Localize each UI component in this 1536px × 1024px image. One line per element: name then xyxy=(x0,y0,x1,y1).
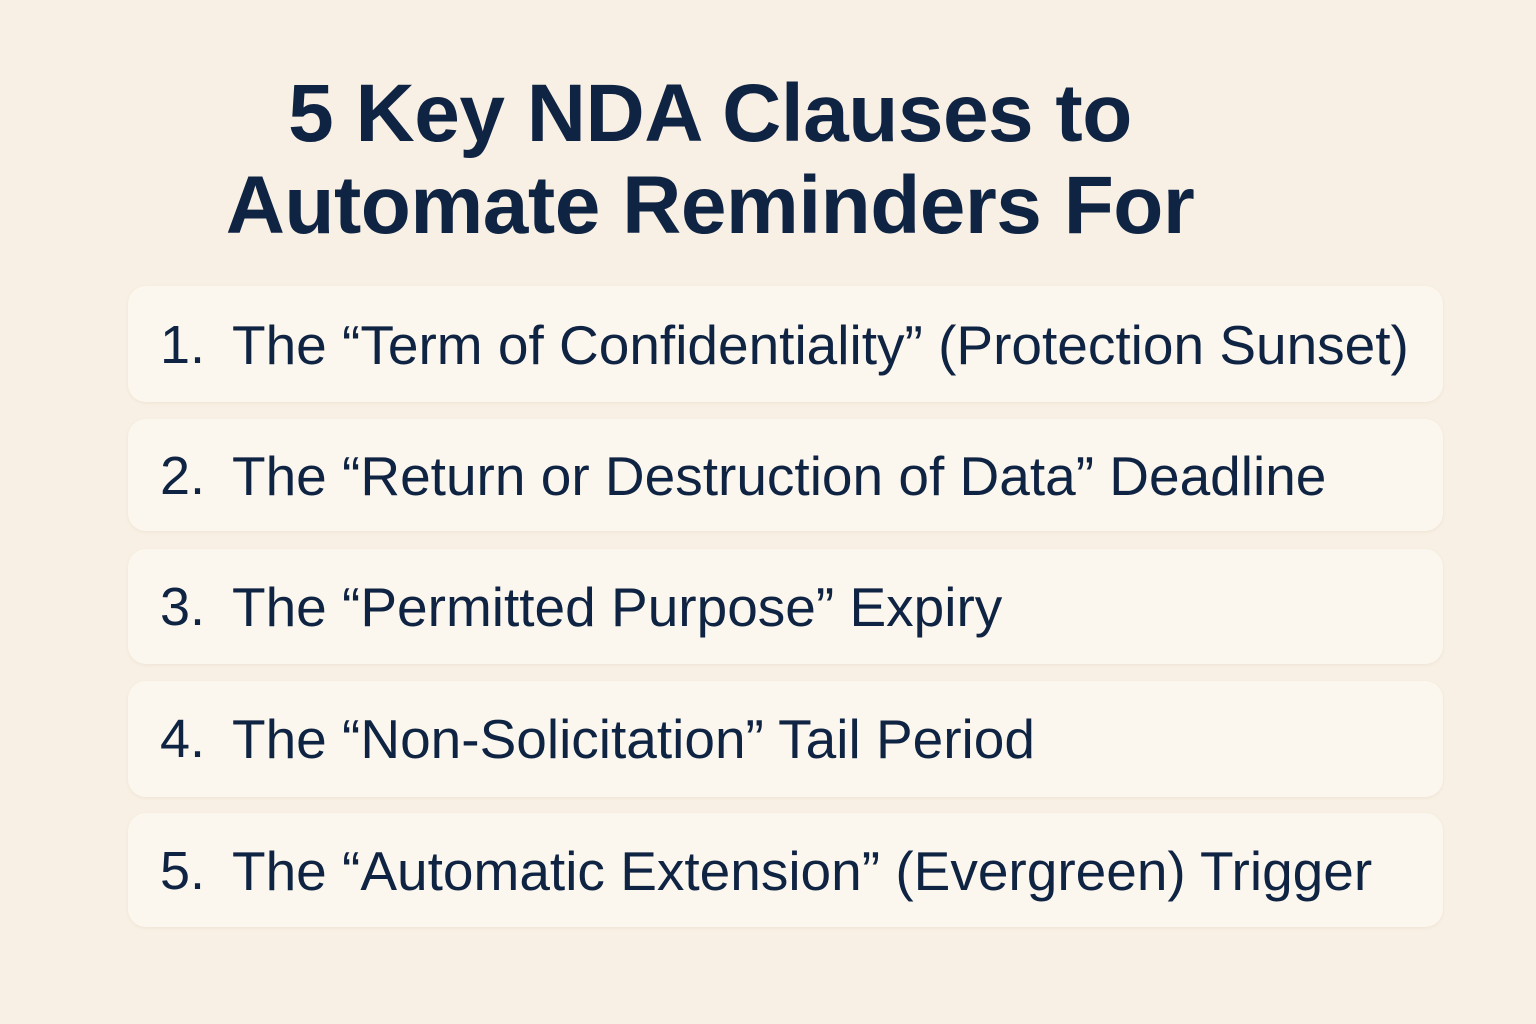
title: Automate Reminders For xyxy=(226,160,1194,251)
text item 2: The “Return or Destruction of Data” Deadline xyxy=(232,445,1326,507)
text item 1: The “Term of Confidentiality” (Protection Sunset) xyxy=(232,314,1409,376)
number 2: 2. xyxy=(160,446,205,506)
number 3: 3. xyxy=(160,577,205,637)
text item 3: The “Permitted Purpose” Expiry xyxy=(232,576,1002,638)
title xyxy=(226,68,1194,251)
number 1: 1. xyxy=(160,315,205,375)
number 5: 5. xyxy=(160,841,205,901)
card: item 2 xyxy=(128,419,1443,531)
card: item 1 xyxy=(128,286,1443,402)
card: item 5 xyxy=(128,813,1443,927)
text item 4: The “Non-Solicitation” Tail Period xyxy=(232,708,1035,770)
number 4: 4. xyxy=(160,709,205,769)
text item 5: The “Automatic Extension” (Evergreen) Trigger xyxy=(232,840,1372,902)
card: item 3 xyxy=(128,549,1443,664)
card: item 4 xyxy=(128,681,1443,797)
title: 5 Key NDA Clauses to xyxy=(288,68,1132,159)
